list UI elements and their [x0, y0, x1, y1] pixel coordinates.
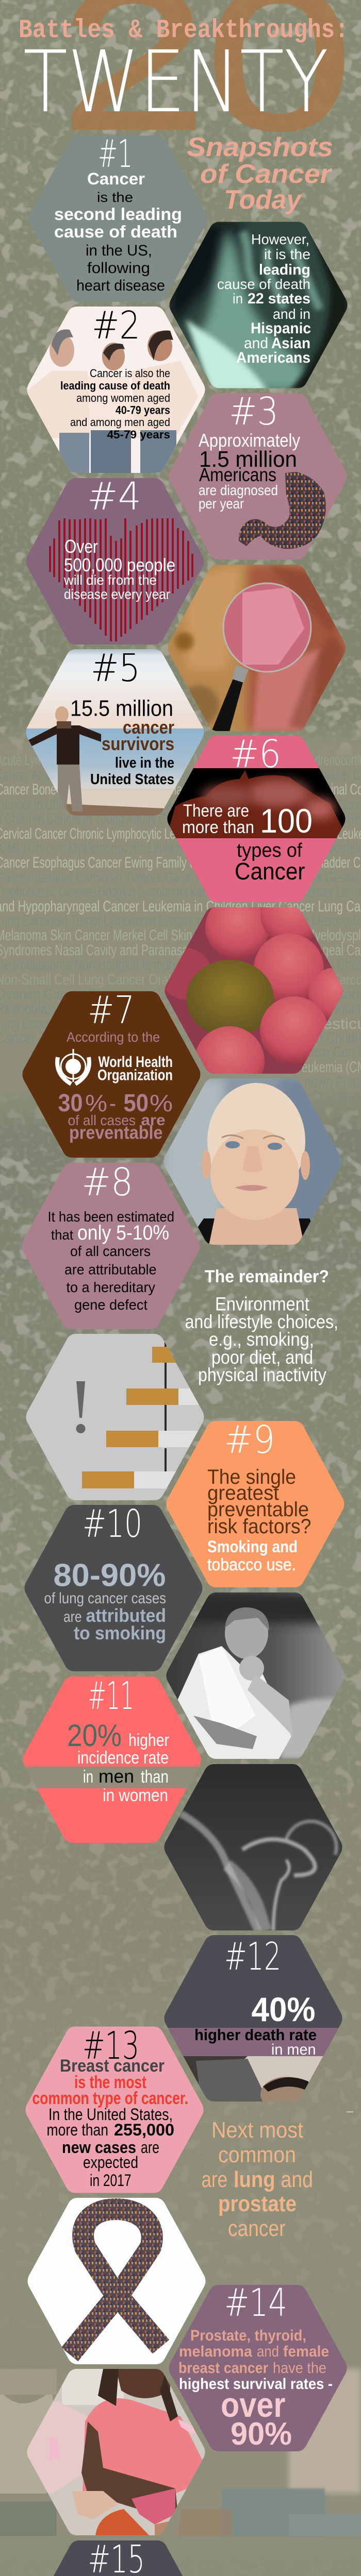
fact 14 text: female	[283, 2343, 329, 2360]
fact 8 text: of all cancers	[70, 1243, 151, 1259]
text block: next most common: prostate	[218, 2191, 297, 2216]
x-ray text: it is the	[264, 246, 310, 262]
fact 10 text: of lung cancer cases	[44, 1590, 166, 1607]
grey band	[22, 1767, 202, 1788]
fact 7 text: %	[150, 1090, 173, 1116]
fact 14 text: breast cancer	[178, 2360, 268, 2377]
fact 7 text: of all cases	[68, 1112, 136, 1128]
fact 11 text: in	[83, 1767, 93, 1787]
fact 3 text: Americans	[199, 464, 276, 485]
x-ray text: and in	[273, 306, 310, 322]
number 5: #5	[91, 646, 140, 690]
fact 13 text: more than	[46, 2121, 108, 2139]
fact 8 text: to a hereditary	[66, 1279, 155, 1295]
fact 6 text: more than	[182, 818, 254, 837]
panel: fact 4 deaths	[26, 474, 204, 645]
fact 8 text: that	[51, 1227, 73, 1243]
subtitle: of Cancer	[200, 159, 333, 189]
fact 13 text: new cases	[62, 2138, 136, 2157]
fact 13 text: in 2017	[90, 2171, 131, 2190]
number 2: #2	[92, 303, 140, 348]
fact 7 text: 30	[58, 1090, 83, 1117]
panel: cancer cell under magnifying glass	[167, 565, 348, 732]
fact 7 text: 50	[124, 1090, 149, 1117]
icon: stomach made of people	[239, 472, 326, 549]
text block: next most common: lung	[234, 2167, 275, 2192]
small dash	[347, 2111, 353, 2112]
fact 11 text: 20%	[67, 1718, 122, 1753]
text block: next most common: cancer	[228, 2216, 286, 2241]
faded full-width photo	[0, 2369, 361, 2536]
number 6: #6	[230, 732, 281, 776]
number 8: #8	[81, 1160, 133, 1205]
fact 3 text: are diagnosed	[199, 482, 278, 498]
panel: fact 10 lung cancer smoking	[25, 1502, 202, 1671]
fact 8 text	[47, 1209, 174, 1313]
tumor photo band	[166, 768, 348, 838]
panel: red cells with olive cancer cell	[165, 907, 342, 1074]
fact 7 text: preventable	[69, 1122, 163, 1143]
fact 5 text: United States	[90, 771, 174, 788]
fact 13 text: is the most	[74, 2073, 146, 2092]
fact 14 text: and	[257, 2343, 279, 2360]
text block: next most common: common	[218, 2142, 296, 2167]
fact 13 text: expected	[83, 2153, 138, 2172]
panel: fact 1 second leading cause	[29, 132, 207, 302]
fact 8 text: gene defect	[74, 1297, 147, 1313]
fact 2 text: 40-79 years	[116, 404, 170, 416]
x-ray text: Asian	[271, 335, 310, 352]
number 7: #7	[88, 988, 135, 1032]
text block: the remainder: physical inactivity	[198, 1364, 326, 1385]
x-ray text: and	[244, 335, 268, 352]
fact 1 text: heart disease	[76, 277, 165, 294]
fact 4 text: disease every year	[64, 586, 170, 602]
fact 6 text: 100	[260, 802, 313, 840]
fact 13 text: common type of cancer.	[32, 2089, 188, 2108]
x-ray text: in	[233, 291, 243, 307]
fact 6 text: types of	[237, 840, 302, 861]
fact 2 text: among women aged	[76, 392, 170, 404]
icon: heart of red bars	[50, 518, 192, 641]
panel: fact 5 survivors	[25, 646, 206, 817]
text block: the remainder: and lifestyle choices,	[185, 1311, 338, 1332]
fact 2 text: 45-79 years	[107, 428, 170, 441]
subtitle: Today	[224, 185, 303, 215]
fact 5 text: survivors	[102, 733, 174, 754]
band and photo of man	[163, 2028, 344, 2112]
fact 9 text: The single	[207, 1466, 296, 1488]
fact 10 text: attributed	[86, 1605, 166, 1626]
panel: fact 14 survival rates	[169, 2281, 347, 2452]
fact 13 text: 255,000	[114, 2121, 174, 2139]
fact 9 text: risk factors?	[207, 1515, 311, 1538]
panel: fact 12 death rate	[163, 1935, 344, 2112]
fact 1 text: is the	[97, 190, 133, 205]
number 12: #12	[224, 1935, 281, 1979]
fact 13 text: Breast cancer	[60, 2056, 165, 2076]
text block: the remainder: poor diet, and	[211, 1347, 313, 1368]
x-ray text: 22 states	[248, 291, 310, 307]
fact 9 text: greatest	[207, 1482, 279, 1504]
fact 14 text: 90%	[231, 2416, 292, 2452]
fact 14 text: melanoma	[179, 2343, 252, 2360]
fact 9 text: tobacco use.	[207, 1555, 296, 1574]
fact 12 text: 40%	[252, 1990, 316, 2028]
photo: three women	[26, 307, 207, 477]
fact 12 text: in men	[271, 2041, 316, 2058]
according text: According to the	[67, 1029, 160, 1045]
fact 8 text: only 5-10%	[77, 1222, 169, 1244]
fact 14 text: over	[221, 2385, 286, 2425]
panel: bald woman portrait	[162, 1078, 346, 1245]
fact 1 text	[54, 170, 182, 294]
panel: fact 6 types of cancer	[166, 732, 348, 902]
fact 10 text: 80-90%	[54, 1558, 166, 1593]
fact 1 text: cause of death	[54, 222, 177, 241]
fact 13 text: In the United States,	[48, 2105, 173, 2124]
panel: fact 11 incidence	[22, 1674, 202, 1843]
fact 6 text	[182, 801, 313, 885]
WHO name	[97, 1054, 173, 1084]
x-ray text: However,	[251, 231, 309, 247]
fact 4 text: Over	[64, 536, 98, 557]
fact 11 text: in women	[103, 1786, 168, 1805]
fact 3 text: per year	[199, 496, 244, 512]
text block: the remainder	[185, 1267, 338, 1385]
text block: the remainder: Environment	[215, 1293, 310, 1315]
panel: fact 8 hereditary	[22, 1160, 200, 1329]
subtitle: Snapshots	[187, 132, 333, 162]
fact 11 text: men	[99, 1766, 134, 1787]
text block: next most common: and	[281, 2167, 313, 2192]
fact 1 text: second leading	[54, 205, 182, 224]
number 4: #4	[87, 474, 141, 519]
fact 8 text: are attributable	[64, 1261, 157, 1278]
panel: fact 3 diagnoses	[169, 389, 347, 560]
fact 10 text: are	[63, 1608, 81, 1625]
fact 5 text: 15.5 million	[70, 696, 173, 721]
x-ray text	[217, 231, 311, 366]
panel: fact 2 women and men	[26, 303, 207, 477]
fact 1 text: Cancer	[87, 170, 145, 188]
fact 13 text	[32, 2056, 188, 2190]
panel: women with ribbons background band and hex	[0, 2369, 361, 2536]
subtitle	[187, 132, 333, 215]
number 14: #14	[224, 2281, 287, 2325]
panel: fact 15 ineffective treatments	[29, 2537, 207, 2576]
fact 1 text: in the US,	[86, 242, 152, 259]
title	[19, 16, 349, 215]
beach photo	[25, 649, 206, 817]
fact 4 text	[63, 536, 175, 602]
text block: next most common: are	[201, 2167, 227, 2192]
fact 5 text	[70, 696, 174, 788]
fact 2 text: Cancer is also the	[90, 367, 170, 380]
panel: fact 13 breast cancer	[26, 2024, 203, 2193]
fact 11 text: than	[141, 1767, 169, 1787]
fact 9 text: preventable	[207, 1498, 309, 1521]
fact 14 text: have the	[273, 2360, 326, 2377]
fact 11 text	[67, 1718, 169, 1805]
number 10: #10	[83, 1502, 142, 1546]
fact 9 text: Smoking and	[207, 1537, 298, 1556]
fact 4 text: will die from the	[63, 572, 157, 588]
x-ray text: leading	[259, 262, 310, 278]
x-ray text: Americans	[236, 349, 310, 366]
fact 7 text: are	[141, 1112, 165, 1129]
text block: the remainder: e.g., smoking,	[209, 1329, 314, 1350]
WHO name: Organization	[97, 1066, 173, 1084]
fact 14 text: Prostate, thyroid,	[190, 2327, 306, 2344]
x-ray text: cause of death	[217, 276, 310, 292]
fact 1 text: following	[87, 260, 150, 277]
fact 4 text: 500,000 people	[64, 554, 175, 575]
text block: the remainder: The remainder?	[205, 1267, 329, 1286]
panel: smoke photo	[163, 1764, 344, 1931]
panel: cigarettes exclamation photo	[25, 1334, 210, 1501]
text block: next most common: Next most	[211, 2117, 303, 2143]
number 3: #3	[229, 389, 278, 434]
fact 12 text: higher death rate	[194, 2026, 317, 2044]
x-ray text: Hispanic	[251, 320, 311, 337]
hex women photo	[26, 2369, 211, 2536]
fact 13 text: are	[141, 2138, 159, 2157]
fact 7 text: -	[109, 1090, 116, 1116]
number 9: #9	[224, 1418, 275, 1462]
fact 3 text: 1.5 million	[199, 447, 297, 472]
fact 8 text: It has been estimated	[47, 1209, 174, 1225]
fact 3 text	[199, 430, 300, 512]
fact 2 text: and among men aged	[70, 416, 170, 429]
panel: coughing man photo	[165, 1592, 347, 1759]
icon: WHO emblem	[57, 1049, 89, 1084]
cancer type word list background	[0, 752, 361, 1106]
panel: crowd forming awareness ribbon	[26, 2198, 208, 2365]
WHO name: World Health	[98, 1054, 173, 1071]
fact 6 text: Cancer	[235, 858, 305, 885]
fact 3 text: Approximately	[199, 430, 300, 451]
fact 12 text	[194, 1990, 317, 2058]
number 1: #1	[98, 132, 133, 176]
fact 7 text	[58, 1090, 173, 1143]
fact 5 text: live in the	[115, 755, 174, 771]
panel: fact 7 preventable	[23, 988, 200, 1158]
x-ray photo	[168, 222, 349, 392]
fact 2 text: leading cause of death	[60, 379, 170, 392]
panel: fact 9 risk factors	[166, 1418, 344, 1587]
magnifying glass	[211, 583, 311, 732]
number 13: #13	[83, 2024, 139, 2068]
text block: next most common	[201, 2117, 313, 2241]
number 11: #11	[88, 1674, 134, 1718]
fact 11 text: higher	[128, 1731, 169, 1750]
fact 9 text	[207, 1466, 311, 1574]
fact 6 text: There are	[183, 801, 249, 821]
fact 5 text: cancer	[123, 717, 174, 738]
fact 10 text	[44, 1558, 166, 1643]
fact 14 text	[178, 2327, 333, 2452]
fact 2 text	[60, 367, 170, 441]
fact 10 text: to smoking	[74, 1622, 166, 1643]
panel: x-ray leading cause	[168, 222, 349, 392]
fact 14 text: highest survival rates -	[179, 2376, 333, 2393]
fact 7 text: %	[85, 1090, 107, 1116]
fact 11 text: incidence rate	[77, 1748, 169, 1768]
